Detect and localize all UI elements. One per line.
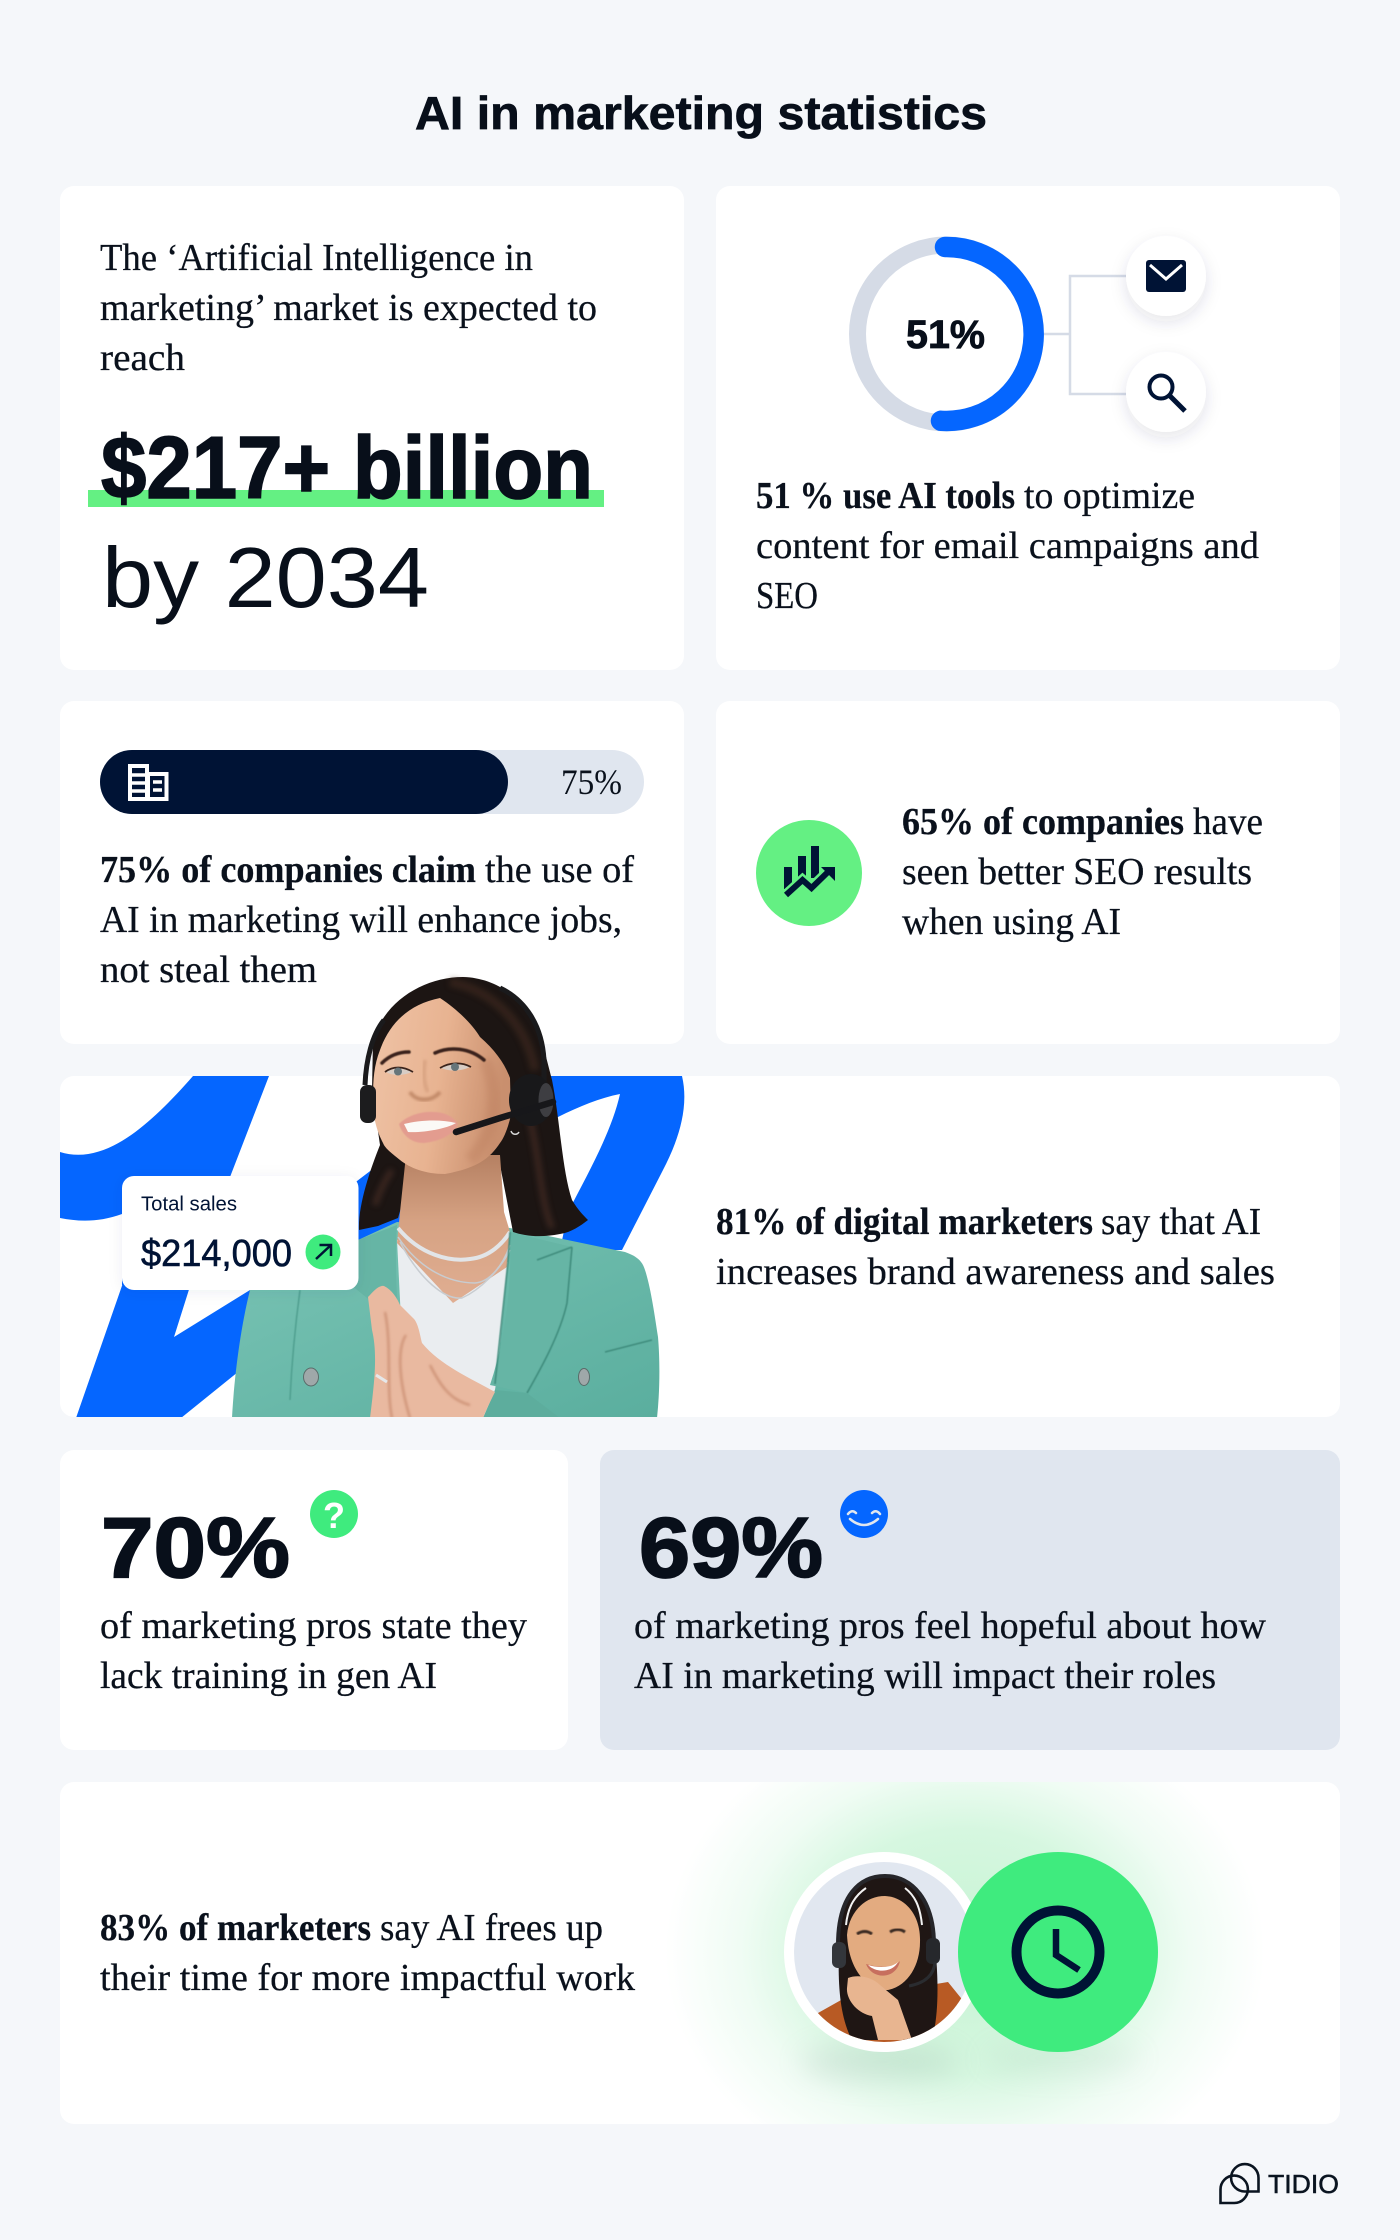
text: time statistic: say AI frees up [380, 1907, 603, 1949]
icon: search [1126, 352, 1206, 432]
progress bar [100, 750, 644, 814]
photo: woman portrait [784, 1852, 971, 2052]
headset [360, 988, 554, 1134]
lapels [354, 1225, 522, 1386]
necklaces [398, 1228, 510, 1260]
text: SEO statistic: have [1193, 801, 1263, 843]
donut chart: 51% [906, 313, 985, 357]
text: SEO statistic [902, 801, 1263, 943]
text: tools statistic: content for email campaigns and [756, 525, 1259, 567]
icon: question mark: ? [323, 1495, 345, 1536]
icon: chart trending up [756, 820, 862, 926]
text: market intro [100, 237, 597, 379]
icon: clock [958, 1852, 1158, 2052]
big number: $217+ billion [101, 418, 593, 517]
donut chart [858, 245, 1036, 423]
text: time statistic: their time for more impactful work [100, 1957, 635, 1999]
portrait face [847, 1896, 920, 1990]
panel: jobs [60, 701, 684, 1044]
big number: 69% [639, 1501, 823, 1596]
icon: email [1126, 236, 1206, 316]
text: market intro: marketing’ market is expected to [100, 287, 597, 329]
face [373, 998, 511, 1174]
panel: time saved [60, 1782, 1340, 2124]
mouth [399, 1112, 458, 1143]
text: training statistic: lack training in gen AI [100, 1655, 437, 1697]
text: brand statistic: say that AI [1101, 1201, 1261, 1243]
text: SEO statistic: 65% of companies [902, 801, 1184, 843]
text: jobs statistic [100, 849, 634, 991]
buttons [304, 1368, 318, 1386]
panel: email and SEO tools [716, 186, 1340, 670]
text: hopeful statistic [634, 1605, 1267, 1697]
decorative blue swoosh [60, 1076, 684, 1418]
text: training statistic [100, 1605, 527, 1697]
progress bar: 75% [561, 762, 622, 802]
logo: Tidio: TIDIO [1268, 2171, 1339, 2199]
hair [359, 977, 588, 1236]
text: market intro: reach [100, 337, 185, 379]
panel: hopeful about roles [600, 1450, 1340, 1750]
cheek and nose shading [470, 1060, 493, 1160]
neck and chest [397, 1155, 510, 1303]
text: hopeful statistic: of marketing pros feel hopeful about how [634, 1605, 1267, 1647]
green glow [705, 1782, 1224, 2124]
eyebrows [382, 1049, 484, 1063]
icon: question mark [310, 1490, 358, 1538]
portrait fist and arm [847, 1976, 912, 2040]
portrait hair [839, 1875, 938, 2040]
title: AI in marketing statistics [415, 87, 987, 139]
text: market intro: The ‘Artificial Intelligence in [100, 237, 533, 279]
text: tools statistic: 51 % use AI tools [756, 475, 1015, 517]
blazer [232, 1222, 659, 1418]
big number suffix: by 2034 [102, 531, 429, 626]
callout: total sales [122, 1176, 358, 1290]
eyes [386, 1064, 470, 1075]
white top [397, 1240, 508, 1418]
big number: 70% [101, 1501, 290, 1596]
text: time statistic: 83% of marketers [100, 1907, 371, 1949]
text: time statistic [100, 1907, 635, 1999]
hands [368, 1286, 495, 1418]
icon: up arrow badge [306, 1234, 340, 1270]
text: SEO statistic: seen better SEO results [902, 851, 1252, 893]
text: SEO statistic: when using AI [902, 901, 1121, 943]
text: brand statistic: 81% of digital marketers [716, 1201, 1093, 1243]
text: jobs statistic: not steal them [100, 949, 317, 991]
label: Total sales [141, 1194, 237, 1216]
text: jobs statistic: the use of [485, 849, 634, 891]
sleeve cuff [484, 1390, 495, 1417]
panel: brand awareness [60, 1076, 1340, 1418]
text: tools statistic: to optimize [1024, 475, 1195, 517]
text: training statistic: of marketing pros state they [100, 1605, 527, 1647]
panel: market size [60, 186, 684, 670]
text: jobs statistic: AI in marketing will enhance jobs, [100, 899, 622, 941]
logo: Tidio [1220, 2164, 1339, 2203]
icon: smiley [840, 1490, 888, 1538]
connector lines [1044, 276, 1126, 394]
highlight bar [88, 490, 604, 507]
text: tools statistic: SEO [756, 575, 818, 617]
panel: lack of training [60, 1450, 568, 1750]
portrait headset [838, 1876, 934, 1945]
photo: woman with headset [232, 977, 659, 1418]
text: brand statistic: increases brand awareness and sales [716, 1251, 1275, 1293]
text: brand statistic [716, 1201, 1275, 1293]
orange top [818, 1982, 962, 2042]
value: $214,000 [141, 1233, 292, 1275]
icon: building [130, 766, 166, 799]
panel: SEO results [716, 701, 1340, 1044]
portrait eyes and mouth [857, 1930, 905, 1934]
text: jobs statistic: 75% of companies claim [100, 849, 476, 891]
text: tools statistic [756, 475, 1259, 617]
text: hopeful statistic: AI in marketing will impact their roles [634, 1655, 1216, 1697]
